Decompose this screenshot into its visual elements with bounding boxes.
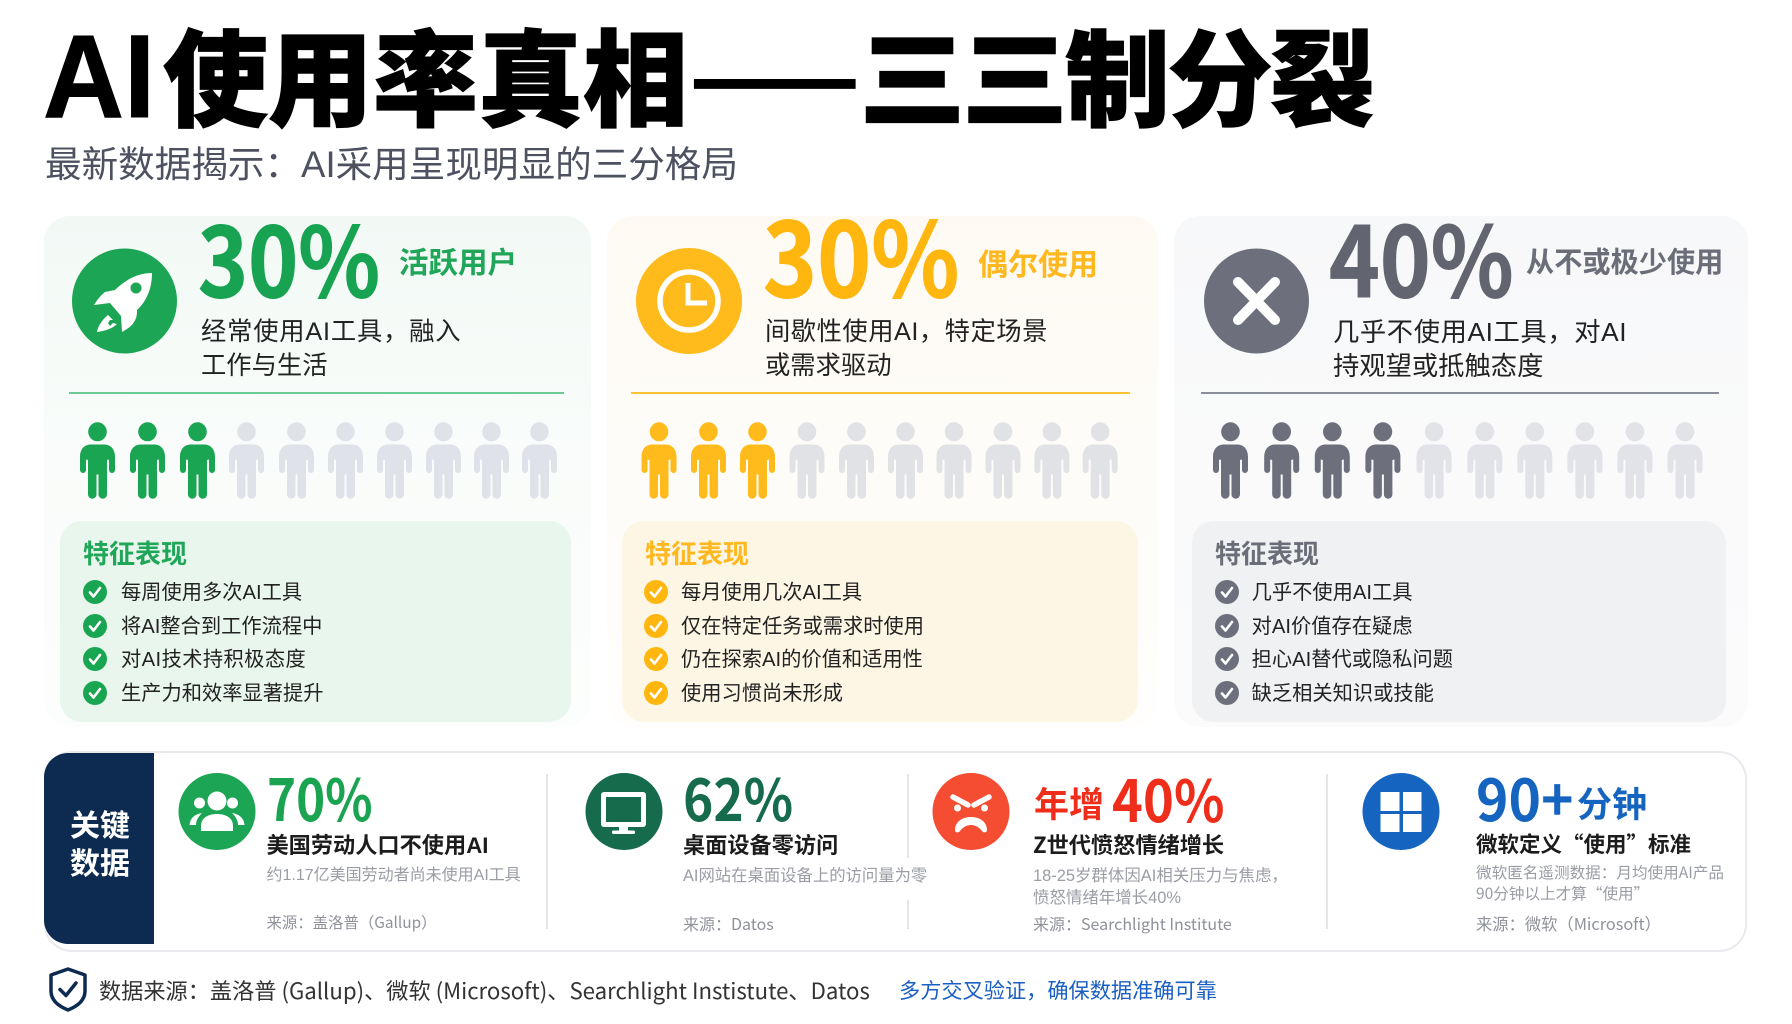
icon: people group bbox=[178, 773, 256, 850]
stat: 90+ minutes: 90分钟以上才算“使用” bbox=[1476, 882, 1649, 904]
description: never: 几乎不使用AI工具，对AI bbox=[1333, 317, 1627, 347]
feature box: never bbox=[1192, 521, 1726, 722]
divider bbox=[1201, 392, 1719, 394]
stat: 90+ minutes: 微软匿名遥测数据：月均使用AI产品 bbox=[1476, 861, 1724, 883]
panel: active users bbox=[44, 216, 591, 727]
subtitle: 最新数据揭示：AI采用呈现明显的三分格局 bbox=[45, 144, 738, 185]
checklist: occasional: 仍在探索AI的价值和适用性 bbox=[681, 649, 923, 671]
icon: monitor bbox=[586, 773, 662, 850]
stat: 90+ minutes: 90+ bbox=[1476, 754, 1574, 838]
stat: 40 percent: Z世代愤怒情绪增长 bbox=[1033, 828, 1224, 860]
description: active users: 工作与生活 bbox=[201, 352, 328, 380]
feature box: active bbox=[60, 521, 571, 722]
stat: 40 percent bbox=[1033, 755, 1288, 935]
checklist: never: 几乎不使用AI工具 bbox=[1252, 582, 1412, 604]
title bbox=[43, 0, 1374, 149]
stat: 70 percent: 来源：盖洛普（Gallup） bbox=[266, 911, 437, 933]
label: occasional: 偶尔使用 bbox=[978, 240, 1098, 284]
checklist: occasional bbox=[644, 580, 924, 705]
icon: clock bbox=[636, 248, 742, 354]
checklist: active: 将AI整合到工作流程中 bbox=[121, 616, 322, 638]
checklist: occasional: 每月使用几次AI工具 bbox=[681, 582, 862, 604]
checklist: never bbox=[1215, 580, 1453, 705]
checklist: active bbox=[83, 580, 324, 705]
pictogram: 3 of 10 occasional bbox=[642, 422, 1118, 499]
description: active users: 经常使用AI工具，融入 bbox=[201, 318, 461, 346]
description: never bbox=[1333, 317, 1627, 381]
icon: angry face bbox=[932, 773, 1010, 850]
description: occasional: 间歇性使用AI，特定场景 bbox=[765, 318, 1048, 346]
stat: 90+ minutes bbox=[1476, 754, 1724, 935]
pictogram: 3 of 10 active bbox=[80, 422, 557, 499]
checklist: never: 缺乏相关知识或技能 bbox=[1252, 683, 1434, 705]
stat: 62 percent: 来源：Datos bbox=[683, 911, 774, 935]
description: active users bbox=[201, 318, 461, 380]
divider bbox=[631, 392, 1130, 394]
title: AI bbox=[43, 11, 155, 143]
checklist: active: 对AI技术持积极态度 bbox=[121, 649, 306, 671]
icon: x mark bbox=[1204, 248, 1309, 354]
label: active users: 活跃用户 bbox=[399, 240, 517, 282]
key data label block: 关键 bbox=[70, 801, 130, 845]
stat: 40 percent: 来源：Searchlight Institute bbox=[1033, 911, 1232, 935]
footer: verification note: 多方交叉验证，确保数据准确可靠 bbox=[899, 974, 1217, 1005]
icon: rocket bbox=[72, 248, 177, 354]
feature heading: occasional: 特征表现 bbox=[645, 534, 749, 571]
feature heading: never: 特征表现 bbox=[1215, 534, 1319, 571]
icon: shield bbox=[49, 967, 87, 1012]
key data label block bbox=[44, 753, 154, 944]
checklist: never: 担心AI替代或隐私问题 bbox=[1252, 649, 1453, 671]
divider bbox=[69, 392, 564, 394]
stat: 40 percent: 18-25岁群体因AI相关压力与焦虑， bbox=[1033, 867, 1288, 885]
panel: occasional users bbox=[607, 216, 1158, 727]
title: 三三制分裂 bbox=[860, 0, 1373, 149]
feature heading: active: 特征表现 bbox=[83, 534, 187, 571]
stat: 90+ minutes: 来源：微软（Microsoft） bbox=[1476, 911, 1661, 935]
panel: key data bbox=[44, 751, 1747, 952]
stat: 90+ minutes: 微软定义“使用”标准 bbox=[1476, 828, 1691, 859]
stat: 62 percent: 桌面设备零访问 bbox=[683, 828, 838, 860]
stat: 40 percent: 40% bbox=[1112, 755, 1224, 839]
big number: 40 percent: 40% bbox=[1329, 184, 1514, 325]
description: occasional bbox=[765, 318, 1048, 380]
stat: 70 percent: 约1.17亿美国劳动者尚未使用AI工具 bbox=[266, 867, 521, 884]
stat: 40 percent: 愤怒情绪年增长40% bbox=[1033, 889, 1181, 907]
stat: 40 percent: 年增 bbox=[1034, 777, 1104, 828]
checklist: active: 生产力和效率显著提升 bbox=[121, 683, 324, 705]
icon: windows bbox=[1362, 773, 1440, 850]
stat: 90+ minutes: 分钟 bbox=[1577, 777, 1647, 828]
pictogram: 4 of 10 never bbox=[1213, 422, 1702, 499]
description: occasional: 或需求驱动 bbox=[765, 352, 892, 380]
big number: 30 percent active: 30% bbox=[198, 186, 380, 325]
panel: non users bbox=[1174, 216, 1748, 727]
description: never: 持观望或抵触态度 bbox=[1333, 351, 1543, 381]
checklist: occasional: 使用习惯尚未形成 bbox=[681, 683, 843, 705]
stat: 62 percent: 62% bbox=[683, 754, 793, 838]
big number: 30 percent occasional: 30% bbox=[763, 178, 959, 327]
footer: data sources: 数据来源：盖洛普 (Gallup)、微软 (Microsoft)、Searchlight Instistute、Datos bbox=[99, 974, 870, 1006]
stat: 70 percent: 70% bbox=[266, 754, 372, 838]
key data label block: 数据 bbox=[70, 839, 130, 883]
feature box: occasional bbox=[622, 521, 1138, 722]
stat: 70 percent bbox=[266, 754, 521, 933]
stat: 62 percent bbox=[683, 754, 927, 935]
label: never: 从不或极少使用 bbox=[1526, 240, 1723, 281]
stat: 70 percent: 美国劳动人口不使用AI bbox=[266, 828, 488, 860]
checklist: never: 对AI价值存在疑虑 bbox=[1252, 616, 1412, 638]
title: 使用率真相 bbox=[163, 0, 688, 149]
checklist: active: 每周使用多次AI工具 bbox=[121, 582, 302, 604]
stat: 62 percent: AI网站在桌面设备上的访问量为零 bbox=[683, 867, 927, 885]
checklist: occasional: 仅在特定任务或需求时使用 bbox=[681, 616, 924, 638]
